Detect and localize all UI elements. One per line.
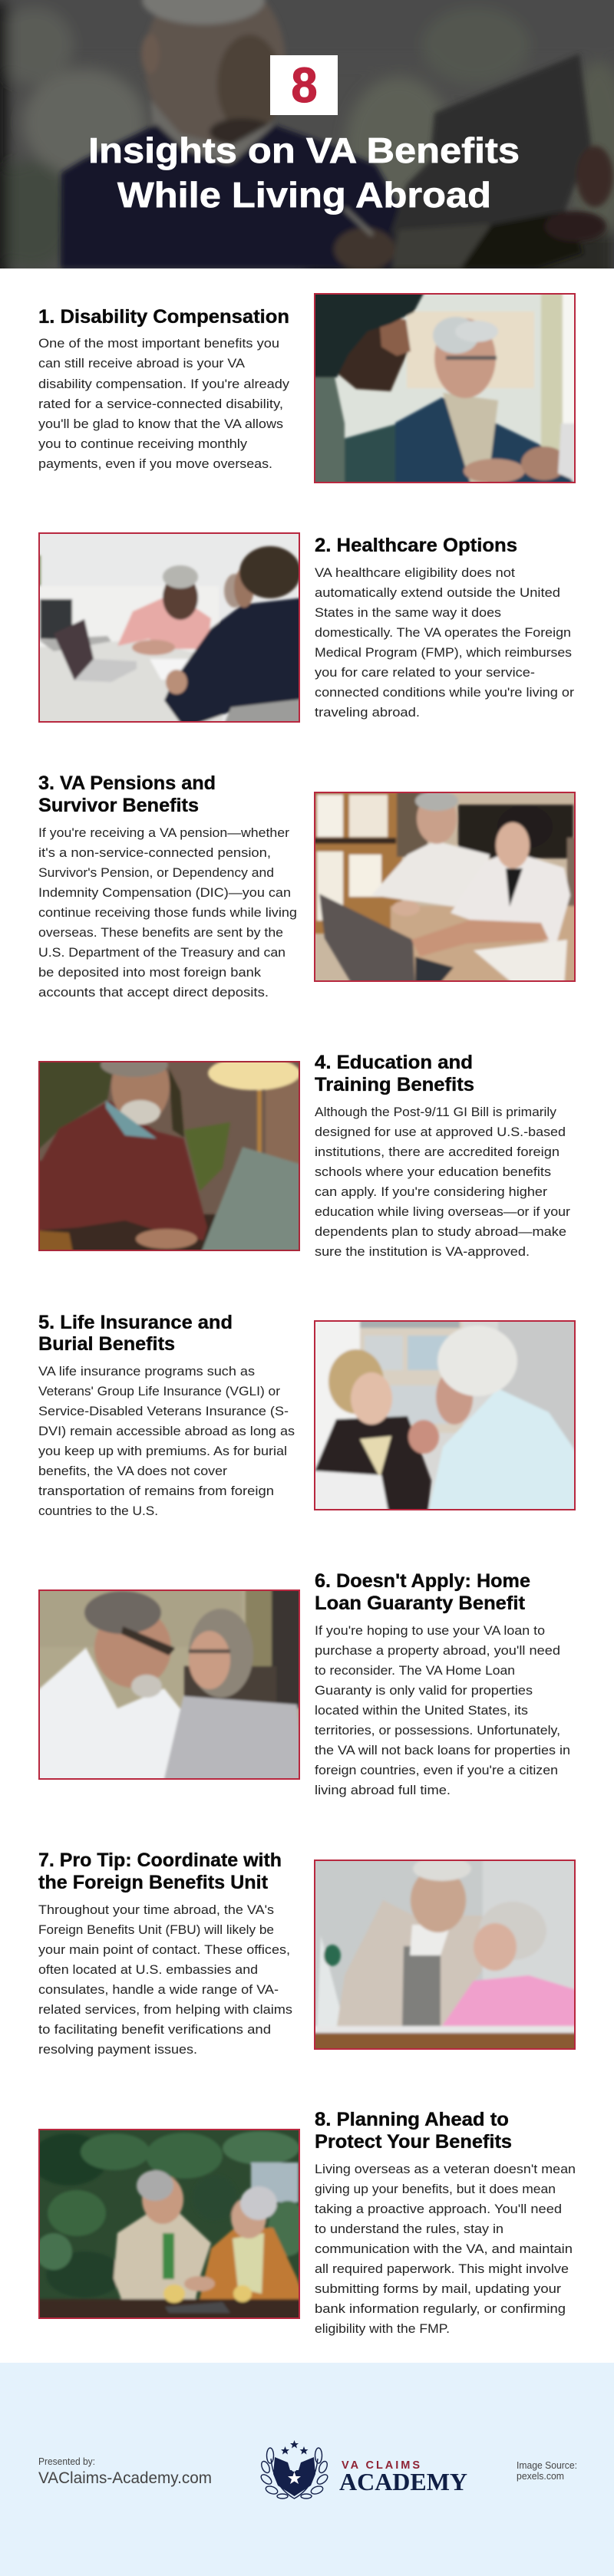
logo wordmark: VA CLAIMS: [342, 2459, 420, 2472]
body text: DVI) remain accessible abroad as long as: [38, 1425, 295, 1438]
body text: be deposited into most foreign bank: [38, 966, 262, 980]
body text: to facilitating benefit verifications and: [38, 2023, 271, 2037]
presented by: [38, 2456, 212, 2487]
body text: taking a proactive approach. You'll need: [315, 2202, 562, 2216]
body text: continue receiving those funds while living: [38, 906, 297, 920]
icon: laurel wreath: [259, 2448, 329, 2499]
panel: 7. Pro Tip: Coordinate with the Foreign Benefits Unit: [38, 1850, 579, 2057]
heading: 8. Planning Ahead to: [315, 2109, 509, 2130]
heading: 7. Pro Tip: Coordinate with: [38, 1850, 282, 1871]
panel: 1. Disability Compensation: [38, 289, 579, 489]
body text: the VA will not back loans for properties in: [315, 1744, 570, 1757]
number badge: 8: [292, 58, 318, 113]
heading: [38, 1850, 282, 1893]
body text: designed for use at approved U.S.-based: [315, 1125, 566, 1139]
heading: Protect Your Benefits: [315, 2131, 512, 2153]
heading: [38, 772, 216, 816]
image source: pexels.com: [517, 2470, 564, 2482]
body text: bank information regularly, or confirming: [315, 2302, 566, 2316]
title: While Living Abroad: [117, 175, 491, 215]
body text: connected conditions while you're living or: [315, 686, 575, 700]
body text: Although the Post-9/11 GI Bill is primarily: [315, 1105, 557, 1119]
icon: stars: [281, 2440, 309, 2455]
title: [88, 130, 520, 215]
image source: [517, 2459, 577, 2482]
photo: older couple smiling at a laptop: [314, 1860, 576, 2050]
heading: 2. Healthcare Options: [315, 535, 517, 556]
body text: submitting forms by mail, updating your: [315, 2282, 562, 2296]
body text: Foreign Benefits Unit (FBU) will likely be: [38, 1923, 274, 1937]
body text: purchase a property abroad, you'll need: [315, 1644, 560, 1658]
header background photo: [0, 0, 614, 268]
body text: you keep up with premiums. As for burial: [38, 1444, 287, 1458]
presented by: Presented by:: [38, 2456, 95, 2467]
body text: States in the same way it does: [315, 606, 501, 620]
body text: Service-Disabled Veterans Insurance (S-: [38, 1405, 289, 1418]
image source: Image Source:: [517, 2459, 577, 2471]
body text: rated for a service-connected disability,: [38, 397, 283, 411]
photo: couple with adviser at a table: [38, 532, 300, 723]
body text: traveling abroad.: [315, 706, 420, 720]
body text: often located at U.S. embassies and: [38, 1963, 258, 1977]
body text: If you're receiving a VA pension—whether: [38, 826, 290, 840]
photo: couple at a garden table: [38, 2129, 300, 2319]
body text: [38, 1903, 292, 2057]
body text: foreign countries, even if you're a citizen: [315, 1764, 558, 1777]
body text: Guaranty is only valid for properties: [315, 1684, 533, 1698]
body text: dependents plan to study abroad—make: [315, 1225, 566, 1239]
body text: you for care related to your service-: [315, 666, 535, 680]
body text: it's a non-service-connected pension,: [38, 846, 271, 860]
body text: Veterans' Group Life Insurance (VGLI) or: [38, 1385, 281, 1398]
body text: can still receive abroad is your VA: [38, 357, 245, 371]
panel: 2. Healthcare Options: [35, 532, 575, 728]
body text: Living overseas as a veteran doesn't mean: [315, 2163, 576, 2176]
heading: Survivor Benefits: [38, 795, 199, 816]
body text: [315, 2163, 576, 2336]
logo: VA Claims Academy: [259, 2440, 467, 2499]
icon: eagle shield: [273, 2457, 315, 2496]
heading: [315, 1570, 530, 1614]
heading: 5. Life Insurance and: [38, 1312, 233, 1333]
heading: 4. Education and: [315, 1052, 473, 1073]
body text: institutions, there are accredited foreign: [315, 1145, 560, 1159]
body text: VA healthcare eligibility does not: [315, 566, 515, 580]
body text: domestically. The VA operates the Foreign: [315, 626, 571, 640]
panel: 6. Doesn't Apply: Home Loan Guaranty Benefit: [35, 1570, 570, 1797]
heading: 3. VA Pensions and: [38, 772, 216, 794]
photo: veteran talking with adviser: [314, 293, 576, 483]
body text: One of the most important benefits you: [38, 337, 279, 351]
body text: education while living overseas—or if your: [315, 1205, 571, 1219]
body text: VA life insurance programs such as: [38, 1365, 255, 1379]
body text: related services, from helping with claims: [38, 2003, 292, 2017]
body text: benefits, the VA does not cover: [38, 1464, 228, 1478]
body text: disability compensation. If you're already: [38, 377, 290, 391]
body text: your main point of contact. These offices,: [38, 1943, 290, 1957]
body text: [315, 1105, 571, 1259]
body text: payments, even if you move overseas.: [38, 457, 272, 471]
heading: [38, 1312, 233, 1355]
photo: man and woman at a laptop: [314, 792, 576, 982]
heading: [315, 2109, 512, 2153]
photo: man in red sweater on laptop: [38, 1061, 300, 1251]
body text: transportation of remains from foreign: [38, 1484, 274, 1498]
footer: [0, 2363, 614, 2576]
body text: If you're hoping to use your VA loan to: [315, 1624, 545, 1638]
body text: Medical Program (FMP), which reimburses: [315, 646, 572, 660]
body text: [315, 1624, 570, 1797]
body text: you'll be glad to know that the VA allows: [38, 417, 283, 431]
photo: woman and man in conversation: [314, 1320, 576, 1510]
body text: resolving payment issues.: [38, 2043, 197, 2057]
body text: can apply. If you're considering higher: [315, 1185, 548, 1199]
number badge: [270, 55, 338, 115]
heading: 6. Doesn't Apply: Home: [315, 1570, 530, 1592]
body text: to reconsider. The VA Home Loan: [315, 1664, 515, 1678]
body text: [315, 566, 575, 720]
photo: couple at a silver laptop: [38, 1589, 300, 1780]
body text: [38, 826, 297, 1000]
heading: 1. Disability Compensation: [38, 306, 289, 328]
body text: automatically extend outside the United: [315, 586, 560, 600]
body text: accounts that accept direct deposits.: [38, 986, 269, 1000]
panel: 4. Education and Training Benefits: [35, 1050, 571, 1259]
body text: schools where your education benefits: [315, 1165, 551, 1179]
body text: territories, or possessions. Unfortunately,: [315, 1724, 560, 1738]
body text: communication with the VA, and maintain: [315, 2242, 573, 2256]
body text: Throughout your time abroad, the VA's: [38, 1903, 274, 1917]
heading: [315, 1052, 474, 1095]
presented by: VAClaims-Academy.com: [38, 2469, 212, 2487]
body text: you to continue receiving monthly: [38, 437, 248, 451]
heading: the Foreign Benefits Unit: [38, 1872, 269, 1893]
body text: all required paperwork. This might involve: [315, 2262, 569, 2276]
heading: Burial Benefits: [38, 1333, 175, 1355]
body text: living abroad full time.: [315, 1784, 451, 1797]
body text: consulates, handle a wide range of VA-: [38, 1983, 279, 1997]
body text: countries to the U.S.: [38, 1504, 158, 1518]
heading: Training Benefits: [315, 1074, 474, 1095]
body text: sure the institution is VA-approved.: [315, 1245, 530, 1259]
panel: 3. VA Pensions and Survivor Benefits: [38, 772, 579, 1000]
body text: U.S. Department of the Treasury and can: [38, 946, 286, 960]
header banner: [0, 0, 614, 284]
body text: to understand the rules, stay in: [315, 2222, 503, 2236]
body text: [38, 337, 290, 471]
panel: 8. Planning Ahead to Protect Your Benefits: [31, 2109, 576, 2336]
heading: Loan Guaranty Benefit: [315, 1593, 526, 1614]
panel: 5. Life Insurance and Burial Benefits: [38, 1312, 579, 1518]
body text: Survivor's Pension, or Dependency and: [38, 866, 274, 880]
logo wordmark: ACADEMY: [339, 2468, 467, 2495]
title: Insights on VA Benefits: [88, 130, 520, 170]
body text: eligibility with the FMP.: [315, 2322, 450, 2336]
body text: [38, 1365, 295, 1518]
body text: located within the United States, its: [315, 1704, 528, 1718]
body text: Indemnity Compensation (DIC)—you can: [38, 886, 291, 900]
body text: overseas. These benefits are sent by the: [38, 926, 283, 940]
body text: giving up your benefits, but it does mean: [315, 2182, 556, 2196]
